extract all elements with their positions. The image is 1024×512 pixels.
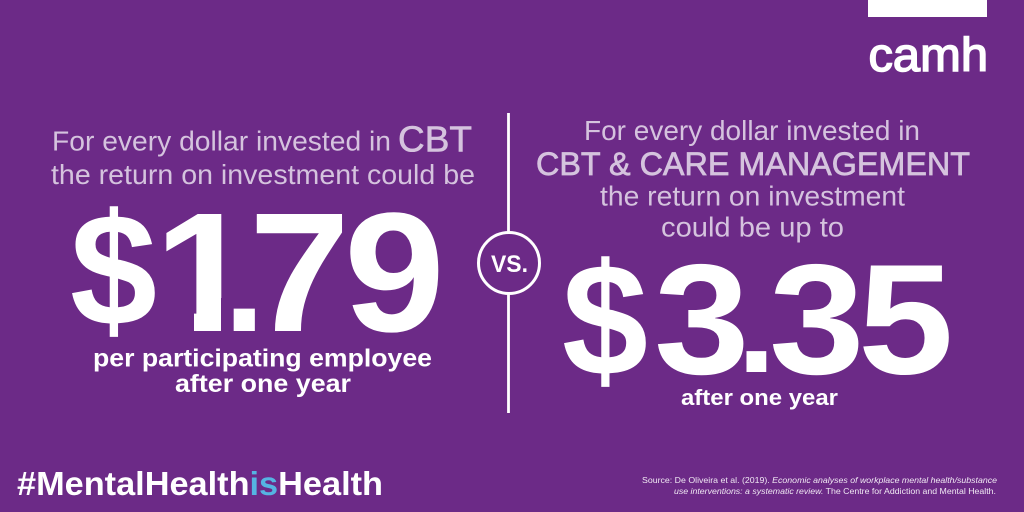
heading: CBT investment: the return on investment could be xyxy=(51,159,475,190)
heading: CBT and care management investment: CBT & CARE MANAGEMENT xyxy=(536,146,970,182)
caption: per participating employee: after one year xyxy=(175,370,351,398)
source note xyxy=(642,475,997,496)
figure: $3.35: 3 xyxy=(769,232,865,408)
heading: CBT and care management investment: the return on investment xyxy=(600,180,905,212)
logo: camh xyxy=(868,0,988,81)
heading: CBT and care management investment xyxy=(536,115,970,242)
figure: $1.79: $ xyxy=(70,180,157,359)
heading: CBT and care management investment: For every dollar invested in xyxy=(584,115,920,146)
logo: camh: camh xyxy=(868,28,988,81)
figure: $1.79: 1 xyxy=(154,178,255,368)
divider with vs. badge xyxy=(478,113,540,413)
divider with vs. badge: VS. xyxy=(491,251,528,278)
figure: $1.79 xyxy=(72,206,438,337)
heading: CBT investment xyxy=(51,118,475,190)
figure: $3.35: $ xyxy=(562,230,648,409)
figure: $1.79: 9 xyxy=(344,178,445,368)
figure: $1.79: 7 xyxy=(249,178,350,368)
caption: per participating employee xyxy=(93,344,432,398)
figure: $3.35: 5 xyxy=(858,232,954,408)
caption: after one year: after one year xyxy=(681,385,838,410)
panel: CBT and care management xyxy=(536,115,970,410)
heading: CBT investment: CBT xyxy=(398,118,472,160)
source note: use interventions: a systematic review. The Centre for Addiction and Mental Health. xyxy=(674,486,996,496)
source note: Source: De Oliveira et al. (2019). Economic analyses of workplace mental health/substance xyxy=(642,475,997,485)
hashtag: #MentalHealth isHealth xyxy=(17,465,383,502)
panel: CBT xyxy=(51,118,475,398)
heading: CBT investment: For every dollar invested in xyxy=(52,126,391,156)
figure: $3.35 xyxy=(562,230,954,409)
figure: $3.35: 3 xyxy=(654,232,750,408)
heading: CBT and care management investment: could be up to xyxy=(661,212,844,242)
figure: $3.35: . xyxy=(737,245,776,402)
figure: $1.79: . xyxy=(224,195,265,363)
caption: per participating employee: per participating employee xyxy=(93,344,432,372)
